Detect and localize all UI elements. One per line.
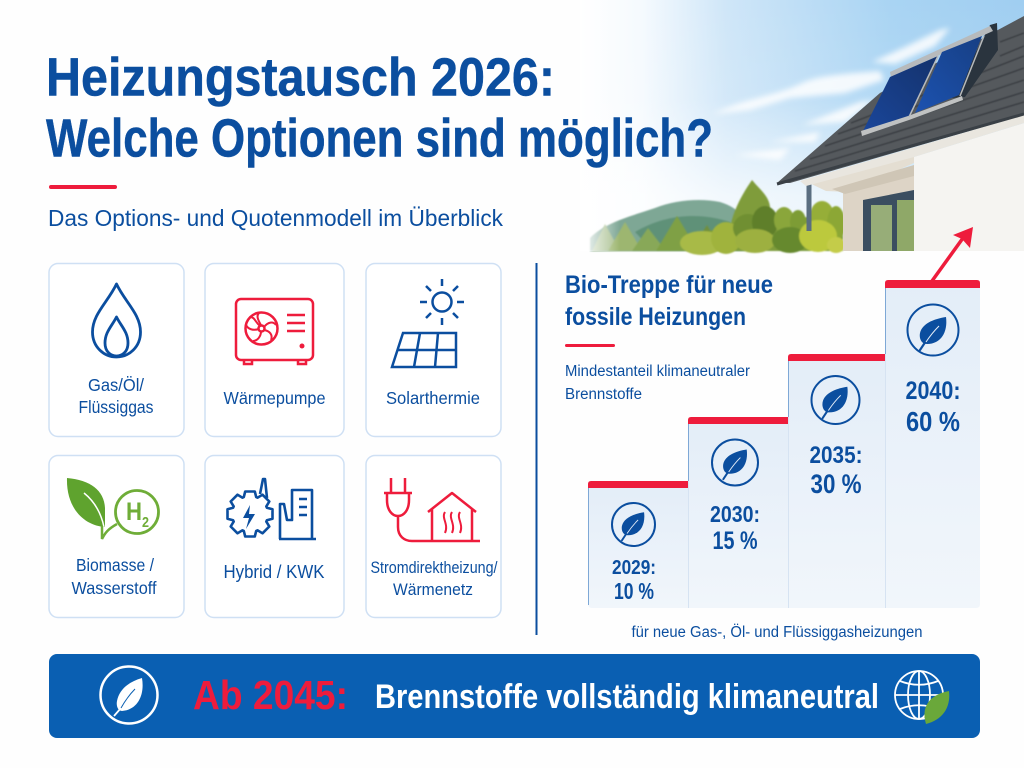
title: Heizungstausch 2026: xyxy=(46,48,555,108)
step 2040 xyxy=(885,280,980,608)
label: Wasserstoff xyxy=(72,578,157,598)
label: Solarthermie xyxy=(386,388,480,408)
label: Hybrid / KWK xyxy=(224,561,325,582)
hills xyxy=(590,200,745,251)
trees xyxy=(592,180,845,255)
title: Welche Optionen sind möglich? xyxy=(46,108,713,168)
porch post xyxy=(806,181,812,231)
divider xyxy=(536,263,538,635)
description: Brennstoffe xyxy=(565,386,642,403)
step 2030: 15 % xyxy=(712,527,758,555)
description: Mindestanteil klimaneutraler xyxy=(565,363,750,380)
chart footnote: für neue Gas-, Öl- und Flüssiggasheizungen xyxy=(632,623,922,641)
white wall xyxy=(914,123,1024,251)
panel: option Biomasse/Wasserstoff xyxy=(49,456,184,618)
icon: leaf and hydrogen: 2 xyxy=(142,514,149,531)
label: Flüssiggas xyxy=(78,397,154,417)
panel: option Gas/Öl/Flüssiggas xyxy=(49,264,184,436)
step 2035: 30 % xyxy=(810,469,862,499)
step 2035 xyxy=(788,354,885,608)
solar collector xyxy=(861,23,998,136)
label: Wärmepumpe xyxy=(224,388,326,408)
step 2030 xyxy=(688,417,788,608)
subtitle: Das Options- und Quotenmodell im Überblick xyxy=(48,205,503,231)
title accent rule xyxy=(49,185,117,189)
step 2029: 2029: xyxy=(612,557,656,579)
facade recess xyxy=(843,170,914,251)
chart: bio staircase xyxy=(588,280,980,608)
step 2029 xyxy=(588,481,688,608)
heading accent rule xyxy=(565,344,615,347)
label xyxy=(370,558,498,599)
heading: Bio-Treppe: fossile Heizungen xyxy=(565,303,746,331)
arrow: rising trend xyxy=(932,227,973,281)
label: Biomasse / xyxy=(76,555,154,575)
window xyxy=(863,190,914,251)
banner text: Brennstoffe vollständig klimaneutral xyxy=(375,678,879,716)
icon: gear and power plant xyxy=(228,479,316,539)
icon: leaf and hydrogen: H xyxy=(126,498,142,526)
icon: sun over solar panel xyxy=(392,279,464,367)
roof xyxy=(777,16,1024,183)
panel: option Solarthermie xyxy=(366,264,501,436)
label xyxy=(72,555,157,598)
icon: white leaf in circle xyxy=(100,666,158,724)
banner xyxy=(49,654,980,738)
panel: option Stromdirektheizung/Wärmenetz xyxy=(366,456,501,618)
label: Stromdirektheizung/ xyxy=(370,558,498,577)
step 2040: 60 % xyxy=(906,406,960,437)
heading: Bio-Treppe xyxy=(565,271,773,331)
icon: heat pump unit xyxy=(236,299,313,364)
step 2029: 10 % xyxy=(614,578,654,604)
panel: option Wärmepumpe xyxy=(205,264,344,436)
label: Wärmenetz xyxy=(393,580,473,599)
title xyxy=(46,48,713,168)
step 2030: 2030: xyxy=(710,501,760,527)
description xyxy=(565,363,750,403)
heading: Bio-Treppe: Bio-Treppe für neue xyxy=(565,271,773,299)
step 2040: 2040: xyxy=(906,377,960,405)
icon: globe with leaf xyxy=(895,671,949,724)
step 2035: 2035: xyxy=(810,442,862,469)
icon: plug and heated house xyxy=(384,478,480,541)
label xyxy=(78,375,154,417)
panel: option Hybrid/KWK xyxy=(205,456,344,618)
banner label: Ab 2045: Ab 2045: xyxy=(193,672,348,718)
icon: flame drop xyxy=(92,284,140,357)
photo: house with solar panels and sky xyxy=(580,0,1024,255)
clouds xyxy=(713,28,950,160)
label: Gas/Öl/ xyxy=(88,375,144,395)
icon: leaf and hydrogen xyxy=(67,478,158,539)
